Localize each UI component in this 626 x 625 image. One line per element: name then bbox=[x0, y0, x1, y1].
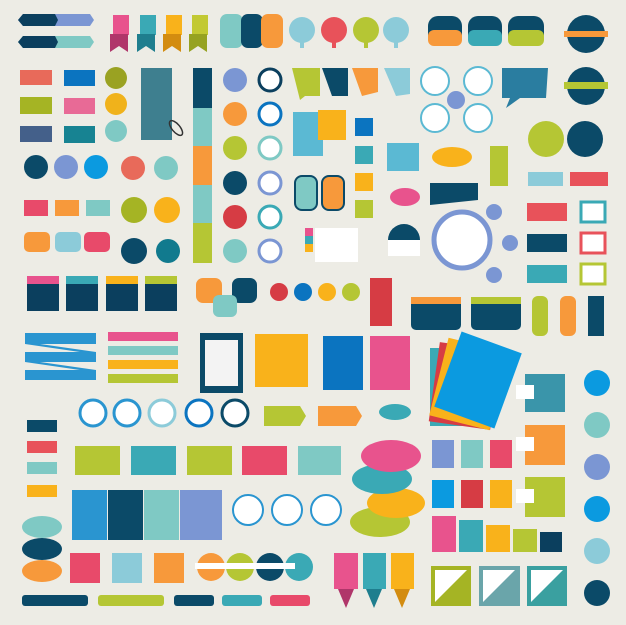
panel: paper stack bbox=[429, 331, 522, 430]
panel: play buttons bbox=[80, 400, 248, 426]
panel: right bubbles bbox=[584, 370, 610, 606]
panel: bottom notes bbox=[70, 553, 313, 583]
panel: top-right badges bbox=[428, 15, 608, 105]
panel: half circles bbox=[105, 67, 127, 142]
panel: wide notes bbox=[75, 446, 341, 475]
panel: small book notes bbox=[432, 440, 562, 552]
panel: rounded tabs bbox=[220, 14, 283, 48]
panel: notes center bbox=[200, 333, 410, 393]
panel: stacked banners bbox=[108, 332, 178, 383]
panel: rounded squares and pins bbox=[196, 278, 604, 336]
panel: tall note with clip bbox=[141, 68, 185, 140]
panel: left ellipse bubbles bbox=[22, 516, 62, 582]
panel: zigzag ribbon bbox=[25, 333, 96, 380]
panel: right column callouts bbox=[387, 68, 608, 284]
panel: speech bubbles left bbox=[24, 155, 180, 264]
panel: pointer tags bbox=[334, 553, 414, 608]
panel: circle cluster diagram bbox=[421, 67, 492, 132]
panel: ribbons bbox=[110, 15, 208, 52]
panel: arrow tags bbox=[264, 404, 411, 426]
panel: center notes bbox=[292, 68, 410, 262]
panel: puzzle squares bbox=[72, 490, 222, 540]
panel: bottom bars bbox=[22, 595, 310, 606]
panel: bottom-right folded notes bbox=[431, 566, 567, 606]
panel: cubes bbox=[516, 374, 565, 517]
panel: pin bubbles bbox=[233, 495, 341, 525]
panel: colored circles column bbox=[223, 68, 247, 263]
panel: ring circles column bbox=[259, 69, 281, 262]
panel: small rectangles bbox=[20, 70, 95, 143]
icon: trees bbox=[289, 17, 409, 48]
panel: vertical ribbon bbox=[193, 68, 212, 263]
panel: top-left banners bbox=[18, 14, 94, 48]
panel: left small flags bbox=[27, 420, 57, 497]
panel: hub diagram bbox=[388, 204, 518, 283]
panel: pockets bbox=[27, 276, 177, 311]
panel: stacked speech bubbles bbox=[350, 440, 425, 537]
